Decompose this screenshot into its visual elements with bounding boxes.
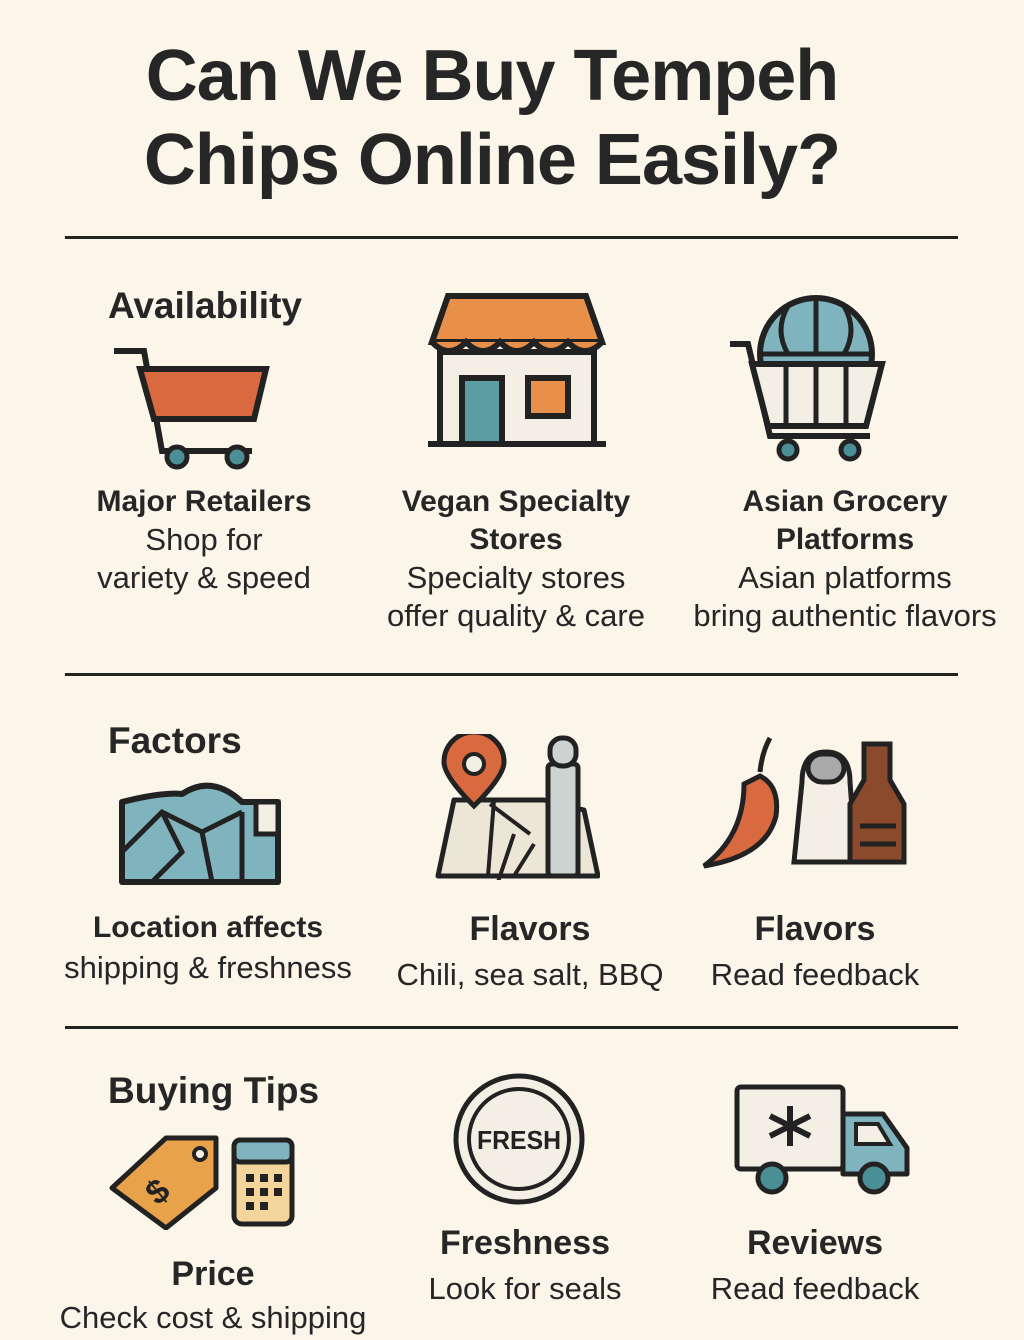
text: vegan specialty stores	[387, 485, 645, 633]
text: asian grocery	[693, 485, 997, 633]
heading: Availability: Availability	[108, 285, 302, 326]
text: major retailers: Major Retailers	[96, 485, 312, 518]
text: vegan specialty stores: offer quality & care	[387, 598, 645, 633]
text: flavors 2: Read feedback	[711, 957, 919, 992]
text: reviews: Reviews	[747, 1224, 883, 1262]
text: reviews	[711, 1224, 920, 1306]
text: location: Location affects	[93, 911, 323, 944]
title	[144, 36, 840, 200]
text: asian grocery: Asian Grocery	[742, 485, 948, 518]
icon: shopping cart	[114, 348, 270, 470]
text: price	[60, 1255, 366, 1335]
icon: map pin shaker	[436, 734, 600, 880]
text: flavors 2	[711, 910, 920, 992]
text: asian grocery: Asian platforms	[738, 560, 952, 595]
heading: Buying Tips: Buying Tips	[108, 1070, 319, 1111]
text: major retailers: variety & speed	[97, 560, 311, 595]
text: price: Check cost & shipping	[60, 1300, 366, 1335]
icon: price tag calculator	[110, 1136, 294, 1230]
icon: chili salt sauce	[702, 736, 906, 868]
text: vegan specialty stores: Vegan Specialty	[402, 485, 630, 518]
text: flavors	[396, 910, 664, 992]
title: Can We Buy Tempeh	[146, 36, 838, 116]
text: location	[64, 911, 352, 985]
icon: globe cart	[730, 295, 886, 462]
text: flavors: Flavors	[470, 910, 590, 948]
text: flavors 2: Flavors	[755, 910, 875, 948]
text: vegan specialty stores: Stores	[469, 523, 563, 556]
text: location: shipping & freshness	[64, 950, 352, 985]
text: major retailers	[96, 485, 312, 595]
icon: map	[119, 782, 281, 885]
text: vegan specialty stores: Specialty stores	[407, 560, 625, 595]
text: freshness: Freshness	[440, 1224, 610, 1262]
text: freshness: Look for seals	[428, 1271, 622, 1306]
text: freshness	[428, 1224, 622, 1306]
text: asian grocery: Platforms	[776, 523, 914, 556]
title: Chips Online Easily?	[144, 120, 840, 200]
text: major retailers: Shop for	[145, 522, 263, 557]
icon: fresh seal: FRESH	[477, 1125, 561, 1155]
icon: delivery truck	[734, 1084, 910, 1194]
icon: store	[428, 293, 606, 447]
icon: price tag calculator: $	[138, 1171, 177, 1212]
icon: fresh seal	[454, 1074, 584, 1204]
text: asian grocery: bring authentic flavors	[693, 598, 997, 633]
heading: Factors: Factors	[108, 720, 242, 761]
text: reviews: Read feedback	[711, 1271, 919, 1306]
text: flavors: Chili, sea salt, BBQ	[396, 957, 664, 992]
text: price: Price	[171, 1255, 255, 1293]
